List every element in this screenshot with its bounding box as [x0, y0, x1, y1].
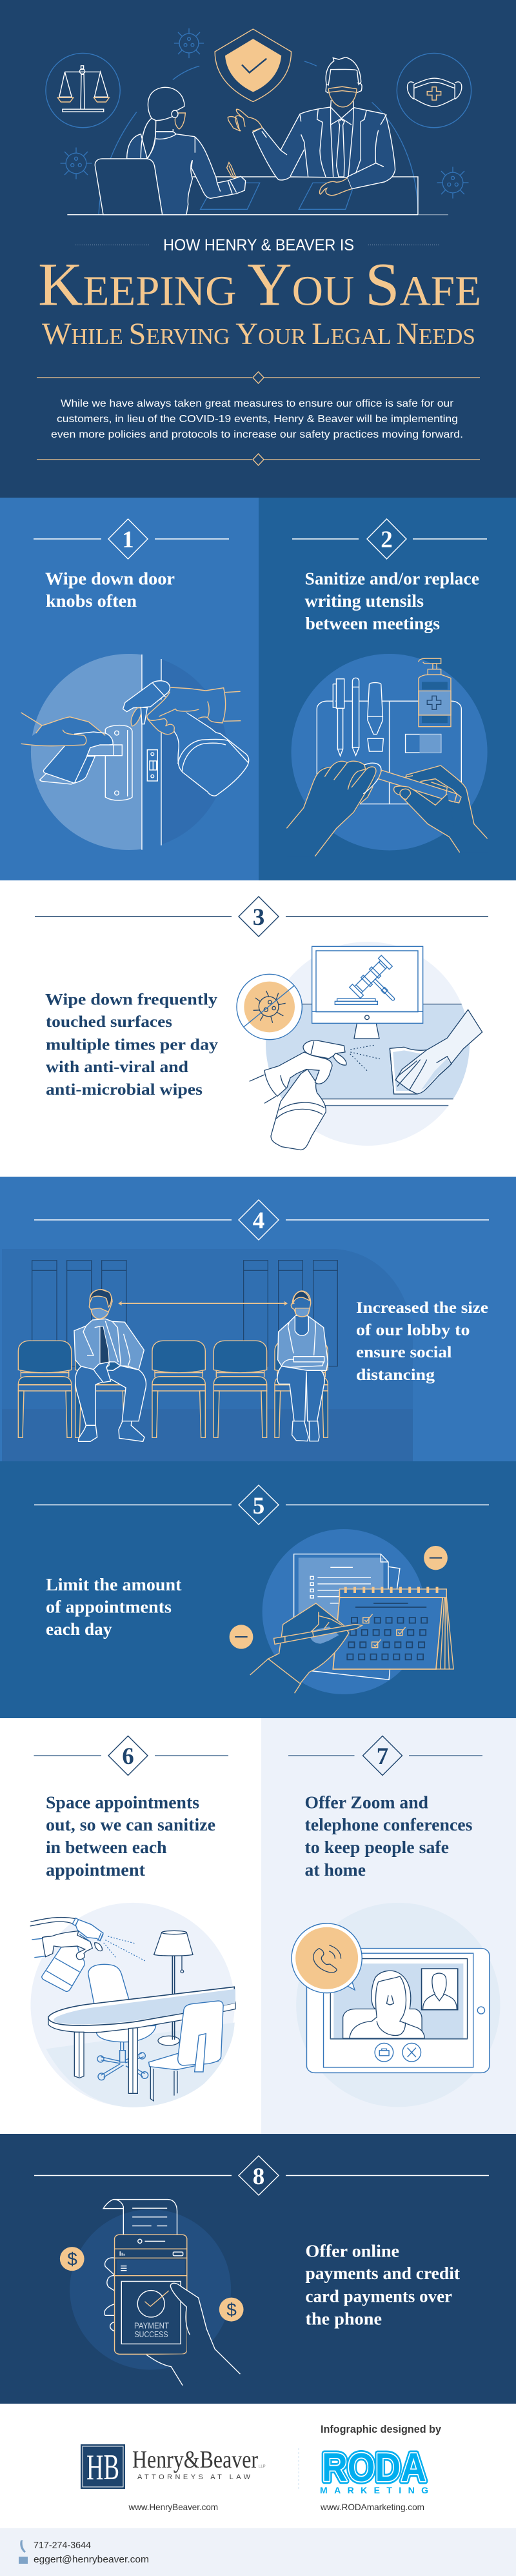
- logo: Henry and Beaver: ATTORNEYS AT LAW: [137, 2473, 251, 2481]
- panel: step 4 larger lobby: [0, 1177, 516, 1461]
- step number 6: [34, 1736, 228, 1775]
- man's head with mask: [326, 57, 362, 107]
- step number 1: 1: [122, 527, 134, 553]
- step 5 text: Limit the amount: [46, 1575, 182, 1594]
- step 6 text: in between each: [46, 1838, 166, 1857]
- illustration: lawyer meeting with client, both masked: [46, 28, 471, 215]
- step number 1: [34, 519, 229, 559]
- title: KEEPING YOU SAFE: [38, 250, 481, 319]
- illustration: phone payment success: [60, 2200, 244, 2386]
- step 2 text: writing utensils: [304, 591, 424, 611]
- figures at the table: [67, 87, 448, 215]
- logo: Henry and Beaver: LLP: [259, 2465, 266, 2469]
- decorative arcs behind the figures: [99, 61, 418, 215]
- step number 7: [288, 1736, 482, 1775]
- panel: step 7 zoom and telephone conferences: [261, 1718, 516, 2134]
- step 2 text: [304, 569, 479, 633]
- credit line: Infographic designed by: [321, 2423, 442, 2435]
- step 8 text: payments and credit: [306, 2264, 460, 2283]
- icon: face mask: [397, 53, 471, 128]
- step 3 text: Wipe down frequently: [45, 991, 218, 1008]
- logo: RODA Marketing: RODA: [322, 2446, 426, 2490]
- step 1 text: [45, 569, 175, 611]
- divider top: [37, 372, 480, 383]
- intro text: even more policies and protocols to increase our safety practices moving forward.: [51, 429, 463, 440]
- step 7 text: to keep people safe: [304, 1838, 449, 1857]
- step 3 text: with anti-viral and: [46, 1059, 188, 1076]
- step number 8: [34, 2156, 489, 2195]
- icon: shield with check: [215, 29, 292, 102]
- step 5 text: each day: [46, 1619, 112, 1639]
- step 5 text: of appointments: [46, 1597, 172, 1616]
- step number 3: 3: [253, 904, 264, 931]
- step number 3: [35, 897, 488, 937]
- icons: virus particles: [61, 28, 468, 198]
- illustration: tablet video call with phone bubble: [292, 1903, 501, 2107]
- step 4 text: distancing: [356, 1366, 435, 1384]
- step number 4: 4: [253, 1208, 264, 1234]
- divider bottom: [37, 454, 480, 465]
- panel: footer logos: [0, 2404, 516, 2528]
- illustration: desk with pens, sanitizer and hands: [286, 654, 488, 857]
- step number 2: 2: [381, 527, 393, 553]
- logo: Henry and Beaver: Henry&Beaver: [132, 2446, 258, 2473]
- step 6 text: Space appointments: [46, 1793, 199, 1812]
- panel: step 6 space appointments: [0, 1718, 261, 2134]
- step 7 text: Offer Zoom and: [304, 1793, 428, 1812]
- step 2 text: between meetings: [306, 614, 440, 633]
- panel: contact bar: [0, 2528, 516, 2576]
- step 3 text: [45, 991, 219, 1099]
- payment success label: PAYMENT: [134, 2321, 169, 2330]
- panel: step 8 online payments: [0, 2134, 516, 2404]
- lobby background shape: [2, 1249, 413, 1461]
- panel: step 1 wipe door knobs: [0, 498, 259, 880]
- website link: RODA: www.RODAmarketing.com: [320, 2502, 424, 2512]
- intro text: customers, in lieu of the COVID-19 events, Henry & Beaver will be implementing: [57, 414, 458, 425]
- step 5 text: [46, 1575, 182, 1639]
- step 8 text: Offer online: [306, 2241, 399, 2260]
- step 6 text: appointment: [46, 1860, 145, 1880]
- illustration: hands cleaning door handle: [21, 654, 249, 850]
- step number 6: 6: [122, 1743, 134, 1770]
- icon: phone: [20, 2540, 26, 2553]
- step 2 text: Sanitize and/or replace: [304, 569, 479, 589]
- dollar coin glyphs: $: [67, 2249, 77, 2269]
- logo: Henry and Beaver: [81, 2444, 266, 2489]
- illustration: two masked people seated apart: [2, 1261, 413, 1461]
- step 7 text: at home: [304, 1860, 366, 1880]
- illustration: monitor, spray bottle and hand wiping desk: [237, 942, 482, 1150]
- step 1 text: Wipe down door: [45, 569, 175, 589]
- step number 4: [34, 1200, 489, 1240]
- intro text: While we have always taken great measures to ensure our office is safe for our: [61, 398, 454, 409]
- step number 5: [34, 1485, 489, 1525]
- heading: eyebrow: HOW HENRY & BEAVER IS: [163, 236, 354, 254]
- panel: step 3 wipe touched surfaces: [0, 880, 516, 1177]
- step 3 text: touched surfaces: [46, 1013, 172, 1031]
- payment success label: [134, 2321, 169, 2339]
- step 1 text: knobs often: [46, 591, 137, 611]
- illustration: sanitizing a table and chairs: [30, 1903, 235, 2107]
- subtitle: WHILE SERVING YOUR LEGAL NEEDS: [42, 317, 475, 351]
- logo: RODA Marketing: MARKETING: [320, 2485, 428, 2495]
- step 8 text: [306, 2241, 460, 2329]
- step 4 text: [356, 1299, 488, 1384]
- step number 8: 8: [253, 2164, 264, 2190]
- step 8 text: card payments over: [306, 2286, 452, 2306]
- step number 7: 7: [377, 1743, 388, 1770]
- step 3 text: multiple times per day: [46, 1037, 219, 1053]
- illustration: calendar, checklist and writing hand: [230, 1529, 453, 1694]
- panel: header: [0, 0, 516, 498]
- step 4 text: Increased the size: [356, 1299, 488, 1317]
- step 4 text: ensure social: [356, 1344, 452, 1361]
- icon: scales of justice: [46, 53, 120, 128]
- dollar coin glyphs: [67, 2249, 237, 2320]
- step 7 text: telephone conferences: [304, 1815, 472, 1834]
- logo: RODA Marketing: RODA: [322, 2446, 426, 2490]
- step 4 text: of our lobby to: [356, 1322, 470, 1339]
- icon: envelope: [19, 2557, 28, 2564]
- step number 5: 5: [253, 1493, 264, 1519]
- step 7 text: [304, 1793, 472, 1880]
- logo: Henry and Beaver: HB: [86, 2448, 119, 2488]
- website link: Henry Beaver: www.HenryBeaver.com: [128, 2502, 218, 2512]
- email: eggert@henrybeaver.com: [34, 2554, 149, 2565]
- step 6 text: [46, 1793, 215, 1880]
- phone number: 717-274-3644: [34, 2540, 91, 2551]
- step number 2: [292, 519, 487, 559]
- panel: step 2 sanitize writing utensils: [259, 498, 516, 880]
- panel: step 5 limit appointments: [0, 1461, 516, 1718]
- dollar coin glyphs: $: [226, 2300, 237, 2320]
- step 8 text: the phone: [306, 2309, 382, 2329]
- step 6 text: out, so we can sanitize: [46, 1815, 215, 1834]
- payment success label: SUCCESS: [134, 2330, 168, 2339]
- step 3 text: anti-microbial wipes: [46, 1081, 203, 1099]
- intro text: [51, 398, 463, 440]
